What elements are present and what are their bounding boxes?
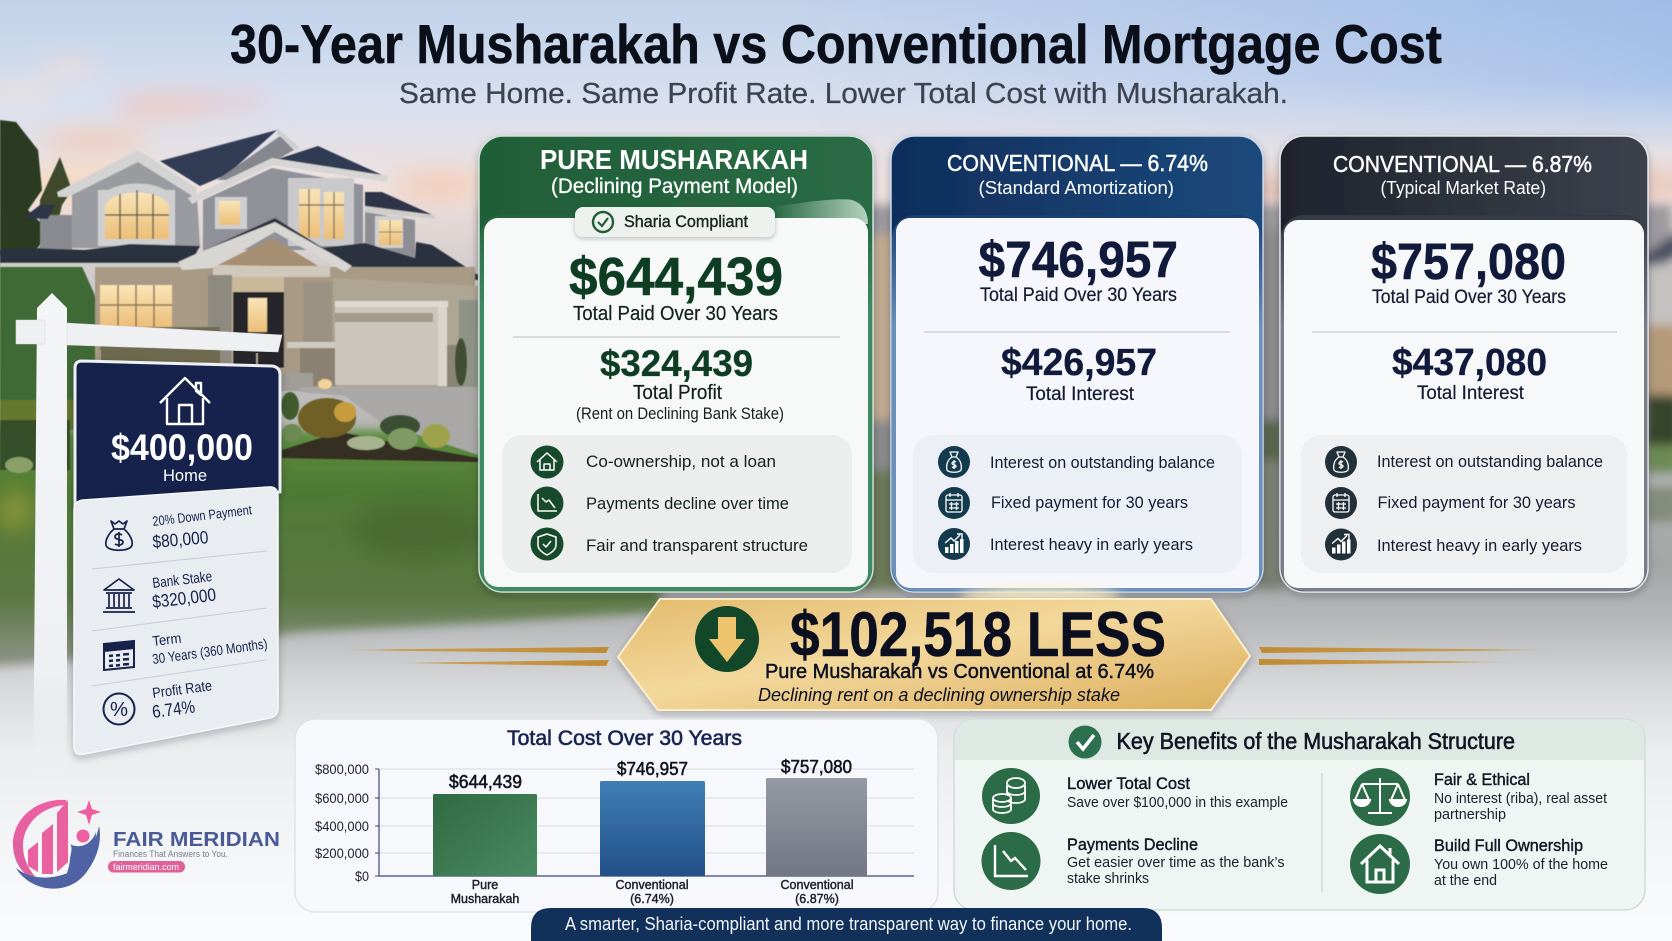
feature list: Interest heavy in early years (990, 535, 1193, 554)
home price: $400,000 (111, 427, 253, 468)
term row (104, 630, 268, 670)
bank stake row: $320,000 (151, 585, 217, 612)
total paid: $746,957 (978, 231, 1178, 288)
bar chart: $400,000 (315, 819, 369, 834)
benefit: fair and ethical (1350, 768, 1607, 826)
bar chart: Conventional (781, 878, 853, 892)
term row: 30 Years (360 Months) (151, 635, 268, 667)
badge: sharia compliant: Sharia Compliant (624, 212, 748, 231)
bank stake row: Bank Stake (152, 569, 213, 592)
panel: conventional 6.74%: Total Paid Over 30 Years (980, 285, 1177, 306)
bar chart: $600,000 (315, 791, 369, 806)
footer tagline pill: A smarter, Sharia-compliant and more transparent way to finance your home. (565, 914, 1132, 934)
profit rate row: 6.74% (151, 697, 196, 722)
savings amount: $102,518 LESS (790, 600, 1166, 670)
feature list (502, 435, 852, 573)
benefit: fair and ethical: No interest (riba), real asset (1434, 791, 1607, 807)
benefit: lower total cost (982, 768, 1288, 824)
panel: conventional 6.87%: Total Interest (1417, 383, 1525, 404)
shrubs (281, 392, 478, 462)
bar chart: Musharakah (451, 892, 519, 906)
bar chart (315, 757, 914, 906)
feature list: Fixed payment for 30 years (1378, 493, 1576, 512)
feature list (913, 435, 1242, 573)
panel: conventional 6.87%: (Typical Market Rate) (1380, 177, 1546, 198)
logo: fair meridian (13, 800, 280, 889)
bar chart: $200,000 (315, 846, 369, 861)
card heading: PURE MUSHARAKAH (540, 144, 808, 175)
bar chart: $757,080 (781, 757, 852, 777)
down payment row: 20% Down Payment (152, 502, 253, 529)
benefit: lower total cost: Save over $100,000 in this example (1067, 795, 1288, 811)
benefit: build full ownership: You own 100% of the home (1434, 857, 1608, 873)
trees (0, 120, 100, 473)
savings banner: Declining rent on a declining ownership stake (758, 684, 1120, 705)
total profit: $324,439 (600, 343, 753, 384)
benefits heading: Key Benefits of the Musharakah Structure (1116, 728, 1515, 754)
feature list: Payments decline over time (586, 494, 789, 513)
profit rate row: % (110, 699, 128, 721)
benefit: build full ownership: at the end (1434, 873, 1497, 889)
savings banner (328, 586, 1566, 710)
logo url pill: fairmeridian.com (113, 862, 179, 873)
blue sky tint, upper right (970, 0, 1672, 140)
panel: conventional 6.87%: Total Paid Over 30 Years (1372, 287, 1566, 308)
clouds (0, 60, 1672, 205)
bar chart: $0 (355, 869, 369, 884)
benefit: build full ownership (1350, 834, 1608, 894)
benefit: payments decline: Get easier over time as the bank’s (1067, 855, 1284, 871)
sign board: details panel (74, 487, 278, 754)
feature list: Fixed payment for 30 years (991, 493, 1188, 512)
sign post (16, 293, 282, 800)
bar chart: (6.74%) (630, 892, 674, 906)
chart panel: total cost over 30 years (295, 719, 938, 912)
house (0, 128, 478, 455)
gold streaks (328, 647, 1566, 666)
subtitle: Same Home. Same Profit Rate. Lower Total Cost with Musharakah. (399, 78, 1288, 110)
benefit: lower total cost: Lower Total Cost (1067, 774, 1190, 793)
panel: conventional 6.74%: Total Interest (1026, 384, 1135, 405)
panel: pure musharakah: (Rent on Declining Bank Stake) (576, 405, 784, 423)
lawn patches (0, 488, 490, 560)
benefit: fair and ethical: Fair & Ethical (1434, 770, 1530, 789)
feature list: Co-ownership, not a loan (586, 452, 776, 471)
sign board: price header (75, 361, 280, 505)
title: 30-Year Musharakah vs Conventional Mortgage Cost (230, 13, 1442, 75)
benefit: payments decline: Payments Decline (1067, 835, 1198, 854)
feature list: Interest on outstanding balance (1377, 452, 1603, 471)
bar chart: $800,000 (315, 762, 369, 777)
chart title: Total Cost Over 30 Years (507, 727, 742, 750)
background photo scene (0, 0, 1672, 752)
icon: down arrow (695, 606, 759, 672)
profit rate row (104, 678, 213, 724)
blurred neighbourhood behind the cards (480, 205, 1672, 590)
lawn (0, 430, 660, 668)
benefit: build full ownership: Build Full Ownership (1434, 836, 1583, 855)
panel: key benefits (954, 719, 1645, 910)
feature list: Interest heavy in early years (1377, 536, 1582, 555)
total paid: $644,439 (569, 247, 783, 307)
logo tagline: Finances That Answers to You. (113, 849, 228, 860)
down payment row (106, 502, 253, 552)
panel: pure musharakah: (Declining Payment Model) (551, 175, 798, 198)
home label: Home (163, 466, 207, 485)
footer tagline pill (531, 908, 1162, 941)
panel: conventional 6.74%: (Standard Amortization) (978, 177, 1174, 198)
feature list (1301, 435, 1627, 573)
panel: conventional 6.87% (1280, 136, 1648, 592)
bar chart: $644,439 (449, 772, 522, 792)
bar chart: Conventional (616, 878, 688, 892)
panel: pure musharakah (479, 136, 873, 592)
bar chart: Pure (472, 878, 498, 892)
term row: Term (151, 630, 182, 649)
panel: pure musharakah: Total Paid Over 30 Years (573, 302, 778, 325)
panel: conventional 6.74% (891, 136, 1263, 592)
benefit: fair and ethical: partnership (1434, 807, 1506, 823)
bar chart: (6.87%) (795, 892, 839, 906)
badge: sharia compliant (575, 207, 775, 237)
card heading: CONVENTIONAL — 6.74% (947, 150, 1208, 176)
bank stake row (103, 569, 217, 612)
down payment row: $80,000 (152, 527, 209, 552)
icon: house (160, 378, 210, 424)
benefits heading (1068, 726, 1515, 758)
benefit: payments decline (982, 832, 1284, 890)
bar chart: $746,957 (617, 759, 688, 779)
total interest: $437,080 (1392, 342, 1547, 384)
feature list: Interest on outstanding balance (990, 453, 1215, 472)
feature list: Fair and transparent structure (586, 536, 808, 555)
total paid: $757,080 (1371, 233, 1566, 290)
logo mark (13, 800, 101, 889)
profit rate row: Profit Rate (151, 678, 213, 702)
card heading: CONVENTIONAL — 6.87% (1333, 151, 1592, 177)
logo wordmark: FAIR MERIDIAN (113, 829, 280, 851)
for-sale sign (16, 293, 282, 800)
panel: pure musharakah: Total Profit (633, 382, 722, 404)
savings banner: Pure Musharakah vs Conventional at 6.74% (765, 661, 1154, 683)
benefit: payments decline: stake shrinks (1067, 871, 1149, 887)
total interest: $426,957 (1001, 342, 1157, 384)
